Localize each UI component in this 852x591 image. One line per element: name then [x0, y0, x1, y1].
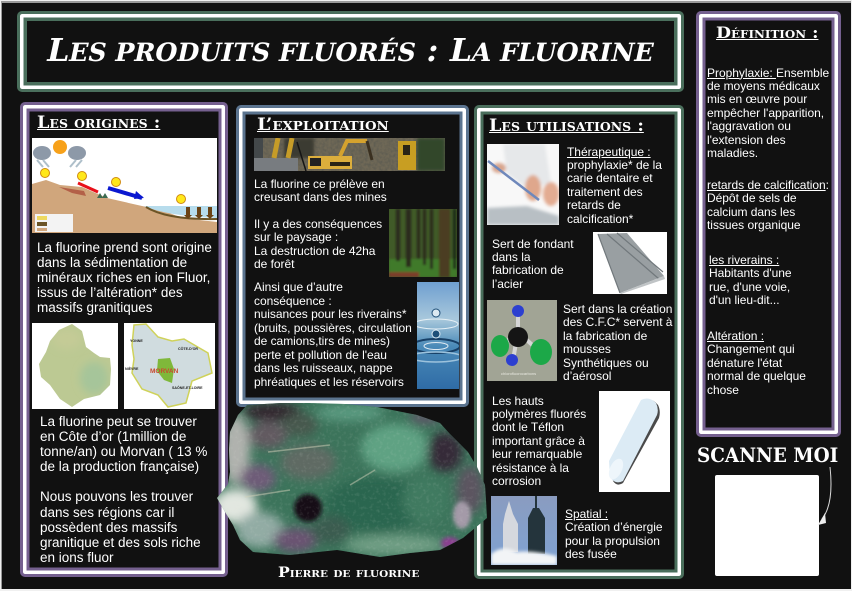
heading: definitions: Définition : — [716, 23, 818, 42]
text block: prophylaxis: empêcher l'apparition, — [707, 106, 824, 120]
text block: other consequences: conséquence : — [254, 294, 332, 308]
heading: exploitation: L’exploitation — [257, 115, 389, 135]
illustration: CFC molecule — [487, 300, 557, 381]
map: Morvan: CÔTE-D'OR — [178, 346, 198, 351]
text block: landscape — [254, 217, 382, 271]
text block: locations: granitique et des sols riche — [40, 535, 201, 550]
text block: mining — [254, 177, 387, 204]
text block: origin — [37, 240, 212, 315]
text block: locations: en Côte d’or (1million de — [40, 429, 186, 444]
text block: polymers: important grâce à — [492, 434, 585, 448]
text block: CFC: Synthétiques ou — [563, 356, 649, 370]
text block: residents: d'un lieu-dit... — [709, 293, 780, 307]
text block: alteration: Changement qui — [707, 342, 795, 356]
text block: polymers: Les hauts — [492, 394, 544, 408]
text block: prophylaxis — [707, 66, 829, 160]
text block: calcification: tissues organique — [707, 218, 801, 232]
map: Côte d'Or — [32, 323, 118, 409]
text block: CFC: la fabrication de — [563, 329, 647, 343]
text block: origin: La fluorine prend sont origine — [37, 240, 212, 255]
text block: alteration: dénature l'état — [707, 356, 782, 370]
text block: landscape: de forêt — [254, 257, 294, 271]
panel: exploitation — [236, 105, 469, 407]
text block: CFC: des C.F.C* servent à — [563, 315, 672, 329]
text block: other consequences — [254, 280, 412, 388]
text block: other consequences: perte et pollution de l'eau — [254, 348, 387, 362]
text block: spatial: des fusée — [565, 547, 617, 561]
text block: origin: issus de l’altération* des — [37, 285, 183, 300]
text block: other consequences: nuisances pour les riverains* — [254, 307, 407, 321]
title: LES PRODUITS FLUORÉS : LA FLUORINE — [43, 32, 657, 69]
text block: CFC: d’aérosol — [563, 369, 611, 383]
text block: therapeutic — [567, 144, 662, 226]
text block: steel: fabrication de — [492, 263, 564, 277]
text block: prophylaxis: l'extension des — [707, 133, 786, 147]
map: Morvan: SAÔNE-ET-LOIRE — [172, 385, 203, 390]
text block: residents — [709, 253, 792, 307]
text block: residents: Habitants d'une — [709, 266, 792, 280]
text block: other consequences: dans les ruisseaux, nappe — [254, 361, 393, 375]
text block: locations: Nous pouvons les trouver — [40, 489, 193, 504]
text block: CFC: mousses — [563, 342, 611, 356]
photo: forest — [389, 209, 457, 277]
map: Morvan: YONNE — [130, 339, 143, 343]
text block: prophylaxis: mis en œuvre pour — [707, 92, 807, 106]
text block: prophylaxis: de moyens médicaux — [707, 79, 820, 93]
text block: origin: massifs granitiques — [37, 300, 153, 315]
caption: stone: Pierre de fluorine — [278, 565, 419, 581]
panel: definitions — [696, 11, 841, 437]
map: Morvan — [124, 323, 215, 409]
photo: water drop — [417, 282, 459, 389]
heading: scan me: SCANNE MOI — [697, 443, 838, 467]
text block: locations: en ions fluor — [40, 550, 114, 565]
panel: origins — [20, 102, 228, 577]
text block: calcification: calcium dans les — [707, 205, 795, 219]
text block: polymers — [492, 394, 586, 488]
text block: locations: tonne/an) ou Morvan ( 13 % — [40, 444, 207, 459]
text block: origin: minéraux riches en ion Fluor, — [37, 270, 210, 285]
text block: locations: de la production française) — [40, 459, 199, 474]
text block: therapeutic: calcification* — [567, 212, 633, 226]
text block: other consequences: de camions,tirs de mines) — [254, 334, 390, 348]
text block: alteration — [707, 329, 806, 397]
text block: landscape: La destruction de 42ha — [254, 244, 375, 258]
text block: spatial: pour la propulsion — [565, 534, 660, 548]
text block: steel: dans la — [492, 250, 530, 264]
text block: origin: dans la sédimentation de — [37, 255, 187, 270]
text block: spatial: Création d’énergie — [565, 520, 663, 534]
text block: calcification: Dépôt de sels de — [707, 191, 797, 205]
text block: locations: dans ses régions car il — [40, 505, 174, 520]
text block: spatial — [565, 507, 663, 561]
panel: title — [17, 11, 684, 92]
photo: medical — [487, 144, 559, 225]
text block: locations: possèdent des massifs — [40, 520, 177, 535]
text block: steel: l’acier — [492, 277, 523, 291]
text block: steel — [492, 236, 574, 291]
text block: prophylaxis: l'aggravation ou — [707, 119, 791, 133]
text block: residents: les riverains : — [709, 253, 779, 267]
text block: alteration: Altération : — [707, 329, 764, 343]
text block: polymers: résistance à la — [492, 461, 569, 475]
text block: steel: Sert de fondant — [492, 236, 574, 250]
map: Morvan: NIÈVRE — [125, 366, 139, 371]
text block: therapeutic: Thérapeutique : — [567, 144, 651, 158]
photo: teflon tube — [599, 391, 670, 492]
text block: polymers: dont le Téflon — [492, 420, 564, 434]
photo: rocket — [491, 496, 557, 565]
text block: mining: La fluorine ce prélève en — [254, 177, 385, 191]
text block: landscape: Il y a des conséquences — [254, 217, 382, 231]
QR code placeholder — [715, 475, 819, 576]
text block: landscape: sur le paysage : — [254, 230, 338, 244]
text block: therapeutic: prophylaxie* de la — [567, 158, 662, 172]
text block: polymers: leur remarquable — [492, 447, 582, 461]
text block: therapeutic: retards de — [567, 198, 621, 212]
text block: calcification: retards de calcification: — [707, 178, 829, 192]
heading: uses: Les utilisations : — [489, 116, 644, 136]
map: Morvan: MORVAN — [150, 368, 179, 375]
panel: uses — [474, 105, 684, 579]
text block: polymers: corrosion — [492, 474, 541, 488]
text block: other consequences: phréatiques et les réservoirs — [254, 374, 404, 388]
text block: therapeutic: traitement des — [567, 185, 643, 199]
text block: calcification — [707, 178, 829, 232]
text block: residents: rue, d'une voie, — [709, 280, 790, 294]
illustration: CFC molecule: chlorofluorocarbons — [501, 371, 536, 376]
photo: excavators — [254, 138, 445, 171]
illustration: fluorite stone — [217, 403, 487, 557]
text block: CFC — [563, 302, 672, 383]
arrow — [818, 467, 832, 525]
text block: polymers: polymères fluorés — [492, 407, 586, 421]
photo: steel plates — [593, 232, 667, 294]
text block: spatial: Spatial : — [565, 507, 608, 521]
heading: origins: Les origines : — [37, 113, 160, 133]
text block: alteration: normal de quelque — [707, 369, 806, 383]
text block: other consequences: (bruits, poussières, circulation — [254, 320, 412, 334]
text block: therapeutic: carie dentaire et — [567, 171, 653, 185]
chart: sedimentation diagram — [32, 138, 217, 233]
text block: prophylaxis: Prophylaxie: Ensemble — [707, 66, 829, 80]
text block: alteration: chose — [707, 383, 739, 397]
text block: CFC: Sert dans la création — [563, 302, 672, 316]
text block: locations: La fluorine peut se trouver — [40, 414, 197, 429]
text block: prophylaxis: maladies. — [707, 146, 758, 160]
text block: mining: creusant dans des mines — [254, 190, 387, 204]
text block: other consequences: Ainsi que d’autre — [254, 280, 343, 294]
text block: locations — [40, 414, 207, 565]
